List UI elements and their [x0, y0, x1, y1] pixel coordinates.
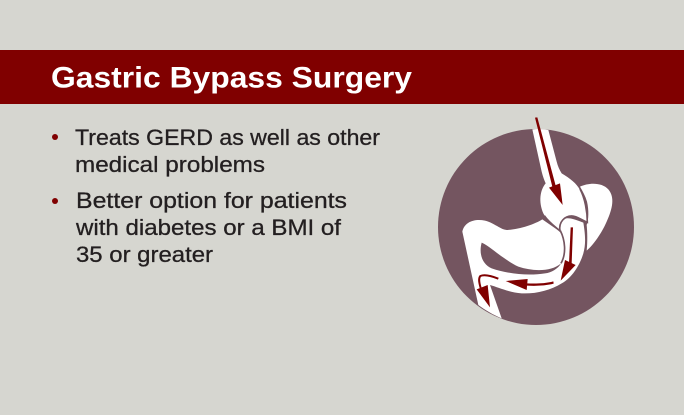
arrow: down the limb — [561, 227, 576, 281]
bullet 1: Treats GERD as well as other — [75, 125, 381, 150]
bullet list — [52, 125, 381, 267]
bullet 2: Better option for patients — [76, 188, 347, 213]
pouch outline — [544, 189, 587, 231]
icon: gastric bypass stomach diagram — [438, 117, 634, 325]
purple circle — [438, 129, 634, 325]
esophagus and gastric pouch — [532, 117, 587, 231]
title: Gastric Bypass Surgery — [51, 62, 412, 94]
bullet 2: with diabetes or a BMI of — [75, 215, 342, 240]
bullet 1 — [52, 125, 381, 177]
arrow: into pouch — [535, 117, 563, 205]
bullet 2: 35 or greater — [76, 242, 214, 267]
bypassed stomach remnant — [580, 184, 612, 251]
title banner — [0, 50, 684, 104]
arrow: down to exit — [477, 275, 498, 307]
arrow: along the intestine — [506, 279, 554, 290]
bullet 2 — [52, 188, 347, 267]
bullet 1: medical problems — [75, 152, 265, 177]
crescent gap — [481, 243, 561, 274]
limb divider — [560, 231, 565, 263]
stomach body, intestine and exit limb — [462, 218, 585, 318]
intestinal flow arrows — [477, 227, 576, 307]
